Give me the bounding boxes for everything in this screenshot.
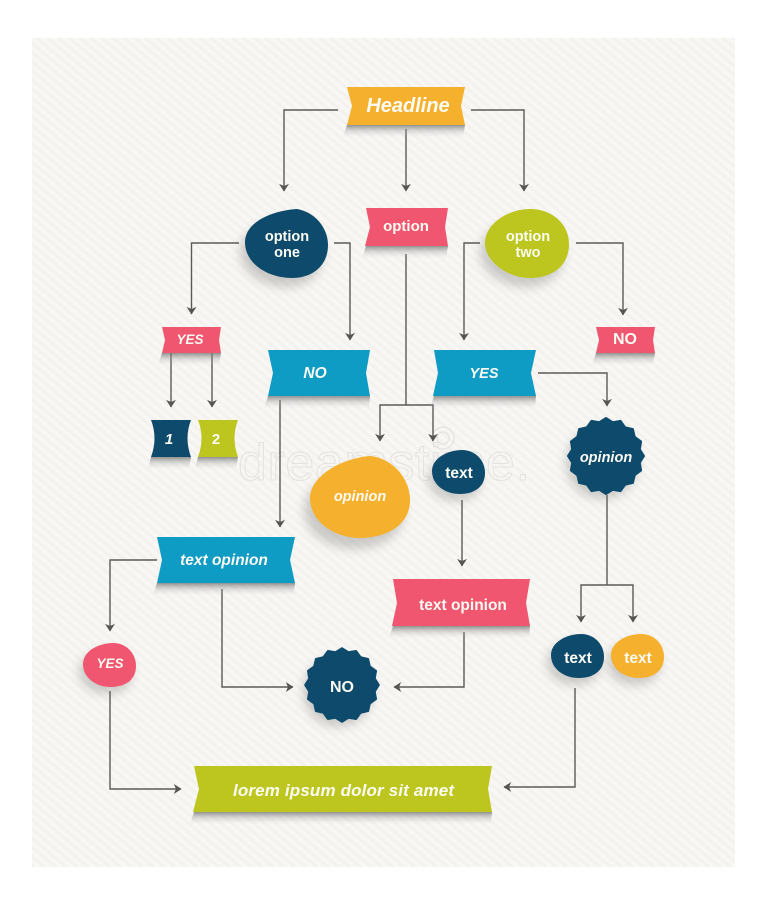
blob: text navy: text (445, 465, 473, 482)
watermark: dreamstime. (238, 434, 530, 492)
blob: option one: option (265, 229, 309, 245)
blob: text navy (428, 450, 485, 501)
ribbon: YES blue (430, 350, 536, 408)
badge: NO (301, 648, 379, 729)
arrow: yes to 2 (211, 353, 213, 407)
blob: YES pink (79, 643, 136, 694)
ribbon: text opinion blue (153, 537, 295, 595)
tag: 1 (148, 420, 191, 469)
arrow: text opinion to yes (110, 560, 157, 631)
ribbon: YES pink (158, 327, 221, 365)
blob: text navy lower: text (564, 650, 592, 667)
ribbon: Headline (343, 87, 465, 137)
blob: option one: one (274, 245, 300, 261)
ribbon: option (362, 208, 448, 258)
ribbon: NO blue: NO (303, 365, 327, 382)
arrow: pink text opinion to no badge (394, 632, 464, 687)
blob: option two: two (516, 245, 541, 261)
arrow: option one to yes (192, 243, 239, 314)
ribbon: text opinion pink (389, 579, 530, 638)
ribbon: text opinion pink: text opinion (419, 597, 507, 614)
arrow: yes to lorem banner (110, 691, 181, 789)
ribbon: text opinion blue: text opinion (180, 552, 268, 569)
ribbon: option: option (383, 218, 429, 235)
arrow: no to text opinion (279, 400, 281, 527)
arrow: option two to yes (464, 243, 480, 340)
blob: opinion orange (304, 456, 410, 549)
tag: 2 (195, 420, 238, 469)
blob: opinion orange: opinion (334, 489, 386, 505)
blob: text orange lower: text (624, 650, 652, 667)
blob: YES pink: YES (96, 656, 124, 671)
banner: lorem ipsum (190, 766, 492, 824)
tag: 2: 2 (212, 431, 220, 448)
arrow: option split to opinion and text (380, 254, 433, 441)
ribbon: YES blue: YES (469, 366, 499, 382)
badge: opinion: opinion (580, 450, 632, 466)
arrow: text to lorem banner (504, 688, 575, 787)
ribbon: NO pink: NO (613, 331, 637, 348)
arrow: option one to no (334, 243, 350, 340)
arrow: headline to option one (284, 110, 338, 191)
blob: option two: option (506, 229, 550, 245)
arrow: headline to option (405, 129, 407, 191)
ribbon: NO pink (592, 327, 655, 365)
arrow: yes to 1 (170, 353, 172, 407)
badge: NO: NO (330, 679, 354, 696)
arrow: text opinion to no badge (222, 589, 293, 687)
arrow: option two to no (576, 243, 623, 315)
banner: lorem ipsum: lorem ipsum dolor sit amet (233, 781, 455, 800)
ribbon: YES pink: YES (176, 332, 204, 347)
blob: option two (480, 209, 569, 287)
arrow: headline to option two (471, 110, 524, 191)
arrow: text to text opinion (461, 500, 463, 566)
blob: text orange lower (607, 634, 664, 685)
ribbon: Headline: Headline (366, 95, 450, 117)
arrow: yes to opinion badge (538, 373, 607, 406)
arrow: opinion badge split to text pair (581, 495, 633, 622)
blob: text navy lower (547, 634, 604, 685)
ribbon: NO blue (264, 350, 370, 408)
badge: opinion (564, 418, 644, 501)
tag: 1: 1 (165, 431, 173, 448)
blob: option one (240, 209, 328, 287)
